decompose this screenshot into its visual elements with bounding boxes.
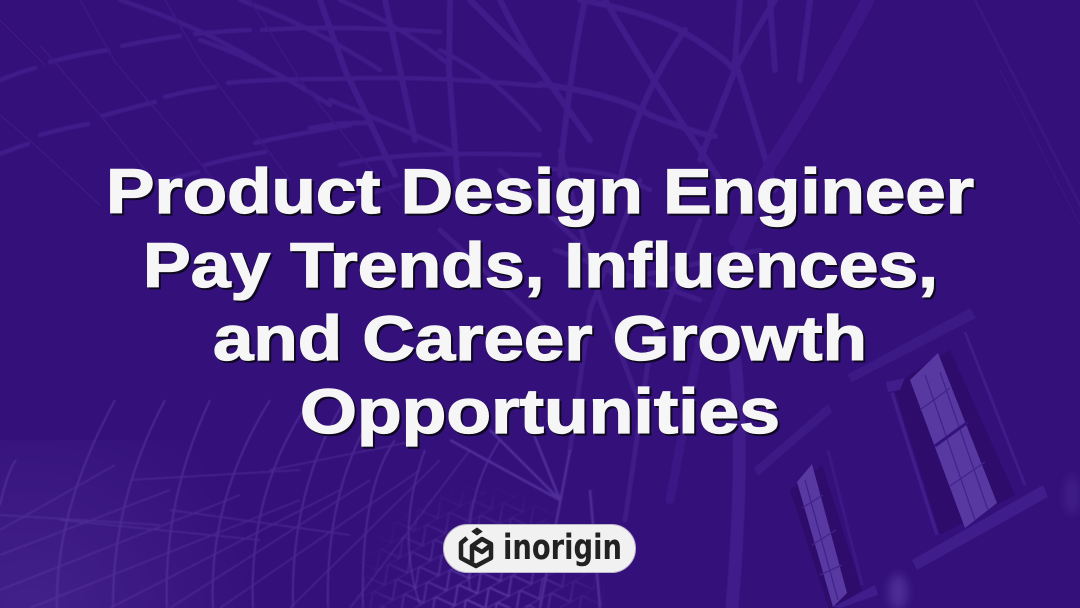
title line 4: Opportunities	[300, 377, 780, 447]
logo badge	[444, 524, 636, 572]
title line 2: Pay Trends, Influences,	[143, 231, 938, 301]
pilaster	[828, 450, 862, 585]
pilaster left	[892, 393, 937, 535]
capital	[886, 378, 905, 392]
title	[106, 157, 974, 447]
glazing bars	[920, 372, 988, 520]
sill	[833, 585, 878, 608]
window frame	[790, 465, 862, 608]
window frame	[893, 350, 1015, 535]
pediment	[847, 308, 976, 382]
window pane	[797, 464, 847, 607]
badge pill	[444, 524, 636, 572]
building: left window	[754, 404, 878, 608]
sill	[912, 485, 1048, 570]
roof lattice: upper	[0, 0, 1080, 240]
roof lattice: fan of braces	[0, 440, 470, 608]
wordmark: inorigin	[503, 528, 622, 568]
title line 3: and Career Growth	[213, 304, 867, 374]
glow: lower-left floor	[0, 440, 300, 608]
radial spokes	[450, 425, 600, 608]
title line 1: Product Design Engineer	[106, 157, 974, 227]
glazing bars	[802, 480, 842, 600]
pilaster right	[965, 332, 1025, 485]
haze near windows	[889, 475, 1079, 608]
roof lattice: lower-left arcs	[0, 400, 500, 608]
building: right window	[847, 308, 1048, 570]
window pane	[910, 353, 997, 528]
icon: hexagon cube	[461, 528, 491, 566]
pediment	[754, 404, 832, 476]
roof lattice: central struts	[440, 150, 760, 608]
roof lattice: bright cluster	[372, 505, 588, 608]
